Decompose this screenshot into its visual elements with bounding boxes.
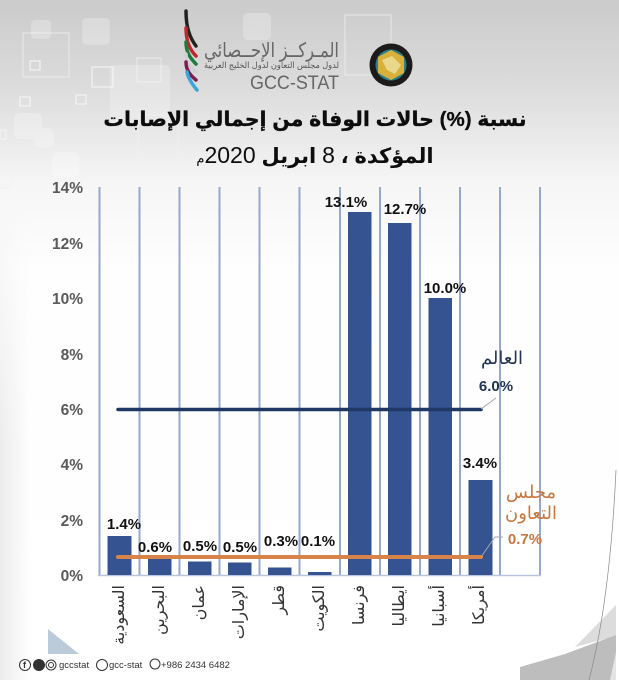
bar value labels: 0.3% (264, 533, 298, 550)
title line 1: نسبة (%) حالات الوفاة من إجمالي الإصابات (103, 108, 527, 131)
GCC label: التعاون (505, 503, 557, 524)
y axis labels: 8% (61, 347, 83, 364)
bar value labels: 3.4% (463, 455, 497, 472)
category labels: عمان (191, 585, 208, 620)
y axis labels: 4% (61, 457, 83, 474)
title (103, 108, 527, 168)
bar value labels: 13.1% (325, 194, 367, 211)
world label (479, 348, 523, 395)
category labels: ايطاليا (391, 585, 408, 626)
GCC label: 0.7% (508, 531, 542, 548)
bar value labels: 12.7% (384, 201, 426, 218)
GCC average line (118, 555, 481, 559)
logo wordmark arabic: المـركــز الإحــصائي (204, 40, 339, 63)
world label: 6.0% (479, 378, 513, 395)
category labels (111, 585, 489, 645)
bar value labels: 0.5% (223, 539, 257, 556)
y axis labels: 6% (61, 402, 83, 419)
GCC label (505, 482, 557, 548)
footer social handles: gcc-stat (109, 660, 143, 671)
icon: GCC emblem (370, 44, 412, 86)
category labels: الإمارات (231, 585, 249, 639)
category labels: البحرين (151, 585, 169, 635)
y axis labels: 12% (52, 236, 83, 253)
bars (108, 212, 492, 575)
footer social handles: f (23, 660, 27, 670)
logo wordmark latin: GCC-STAT (250, 72, 339, 94)
logo subtitle arabic: لدول مجلس التعاون لدول الخليج العربية (204, 60, 339, 70)
y axis labels: 10% (52, 291, 83, 308)
footer social handles: +986 2434 6482 (161, 660, 230, 671)
bar value labels: 0.6% (138, 539, 172, 556)
title line 2: المؤكدة ، 8 ابريل 2020م (196, 142, 434, 168)
footer social handles: gccstat (59, 660, 89, 671)
bar value labels: 10.0% (424, 280, 466, 297)
bar value labels (107, 194, 497, 556)
bar value labels: 0.5% (183, 538, 217, 555)
category labels: الكويت (311, 585, 329, 632)
bar value labels: 0.1% (301, 533, 335, 550)
world label: العالم (481, 348, 523, 369)
category labels: السعودية (111, 585, 129, 645)
category labels: أمريكا (468, 585, 489, 625)
y axis labels: 0% (61, 568, 83, 585)
bar chart (52, 180, 557, 645)
GCC label: مجلس (506, 482, 556, 502)
icon: ribbon stripes (186, 11, 197, 90)
footer social handles (20, 659, 230, 671)
bar value labels: 1.4% (107, 516, 141, 533)
y axis labels: 14% (52, 180, 83, 197)
icons: social (20, 659, 160, 670)
category labels: قطر (271, 585, 289, 616)
y axis labels (52, 180, 83, 585)
corner decoration bottom right (520, 470, 616, 680)
category labels: أسبانيا (428, 585, 448, 627)
category labels: فرنسا (351, 585, 369, 625)
logo: GCC-STAT (186, 11, 412, 94)
y axis labels: 2% (61, 513, 83, 530)
corner decoration bottom left (48, 629, 79, 654)
world average line (118, 408, 481, 411)
